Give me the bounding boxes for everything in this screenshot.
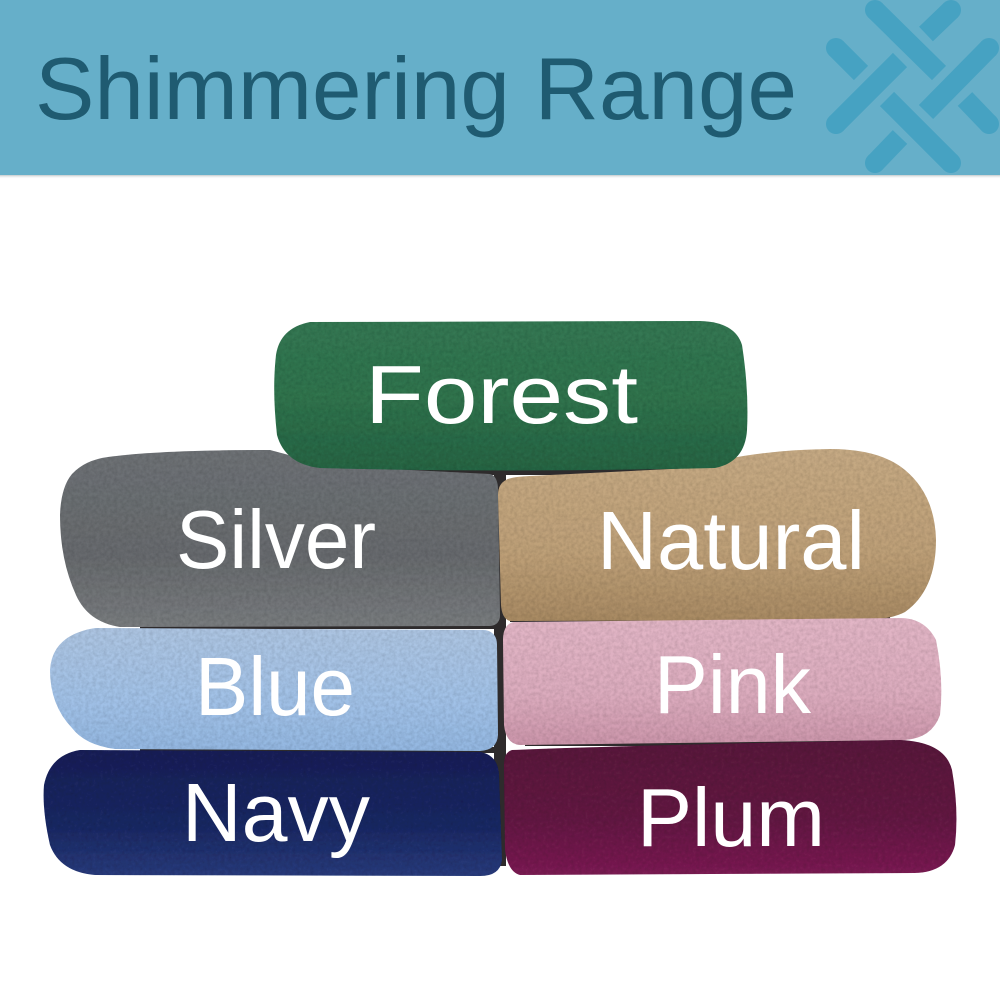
icon: woven logo	[826, 0, 999, 173]
title: Shimmering Range	[35, 39, 797, 138]
dark seams between blankets	[140, 465, 895, 866]
blanket: forest	[274, 321, 747, 470]
label: Blue: Blue	[195, 640, 355, 733]
blanket: natural	[498, 449, 936, 621]
blanket: plum	[504, 740, 956, 875]
label: Natural: Natural	[597, 494, 865, 587]
label: Forest: Forest	[365, 348, 638, 441]
header banner	[0, 0, 1000, 179]
blanket: navy	[44, 750, 502, 876]
blanket: pink	[503, 618, 941, 745]
label: Pink: Pink	[654, 638, 811, 731]
label: Navy: Navy	[182, 766, 370, 859]
blanket: blue	[50, 628, 498, 751]
label: Plum: Plum	[637, 771, 825, 864]
label: Silver: Silver	[176, 493, 376, 586]
blanket: silver	[60, 450, 500, 627]
